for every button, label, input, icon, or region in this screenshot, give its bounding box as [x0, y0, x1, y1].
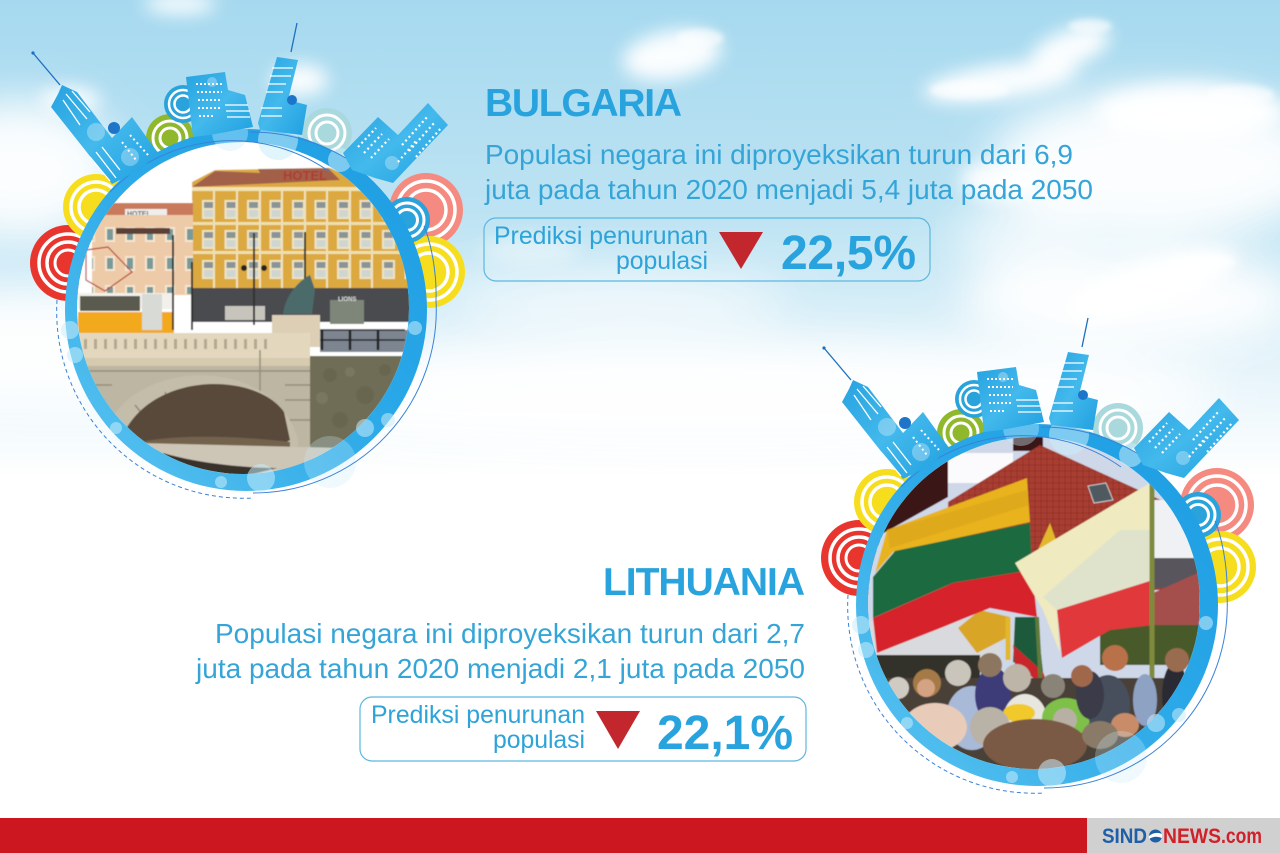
callout: Lithuania prediction: 22,1%: [657, 707, 793, 760]
blue ring: [856, 424, 1218, 786]
photo: Lion's Bridge, Sofia: HOTEL: [127, 211, 151, 218]
emblem: Lithuania city globe: [821, 318, 1256, 793]
logo: SINDONEWS.com: .com: [1221, 825, 1262, 848]
description: Bulgaria: juta pada tahun 2020 menjadi 5,4 juta pada 2050: [484, 174, 1093, 205]
text panel: Lithuania: [195, 561, 806, 761]
callout: Bulgaria prediction: populasi: [616, 248, 708, 275]
blue ring: [65, 129, 427, 491]
callout: Lithuania prediction: populasi: [493, 727, 585, 754]
icon: globe: [1149, 830, 1162, 842]
icon: down triangle: [719, 232, 763, 269]
decorative concentric circles: [821, 380, 1256, 603]
callout: Bulgaria prediction: [484, 218, 930, 281]
description: Bulgaria: [484, 139, 1093, 205]
logo: SINDONEWS.com: NEWS: [1163, 825, 1221, 848]
description: Lithuania: [195, 618, 805, 684]
footer bar: [0, 818, 1280, 853]
photo: Lithuanian flags and crowd: [868, 437, 1200, 769]
callout: Bulgaria prediction: Prediksi penurunan: [494, 223, 708, 250]
description: Lithuania: Populasi negara ini diproyeksikan turun dari 2,7: [215, 618, 805, 649]
description: Lithuania: juta pada tahun 2020 menjadi 2,1 juta pada 2050: [195, 653, 805, 684]
ring bubbles and thin outline: [57, 115, 436, 498]
decorative concentric circles: [30, 85, 465, 308]
logo: SINDONEWS.com: SIND: [1102, 825, 1147, 848]
heading: Lithuania: LITHUANIA: [603, 561, 805, 604]
photo: Lion's Bridge, Sofia: [70, 135, 415, 480]
city skyline: [822, 318, 1239, 479]
description: Bulgaria: Populasi negara ini diproyeksikan turun dari 6,9: [485, 139, 1073, 170]
callout: Lithuania prediction: [360, 697, 806, 761]
callout: Lithuania prediction: Prediksi penurunan: [371, 702, 585, 729]
heading: Bulgaria: BULGARIA: [485, 82, 682, 125]
city skyline: [31, 23, 448, 184]
callout: Bulgaria prediction: 22,5%: [781, 227, 916, 280]
ring bubbles and thin outline: [848, 410, 1227, 793]
text panel: Bulgaria: [484, 82, 1093, 281]
icon: down triangle: [596, 711, 640, 749]
emblem: Bulgaria city globe: [30, 23, 465, 498]
photo: Lion's Bridge, Sofia: LIONS: [338, 297, 356, 303]
logo: SINDONEWS.com: [1102, 825, 1262, 848]
photo: Lion's Bridge, Sofia: HOTEL: [283, 168, 327, 183]
